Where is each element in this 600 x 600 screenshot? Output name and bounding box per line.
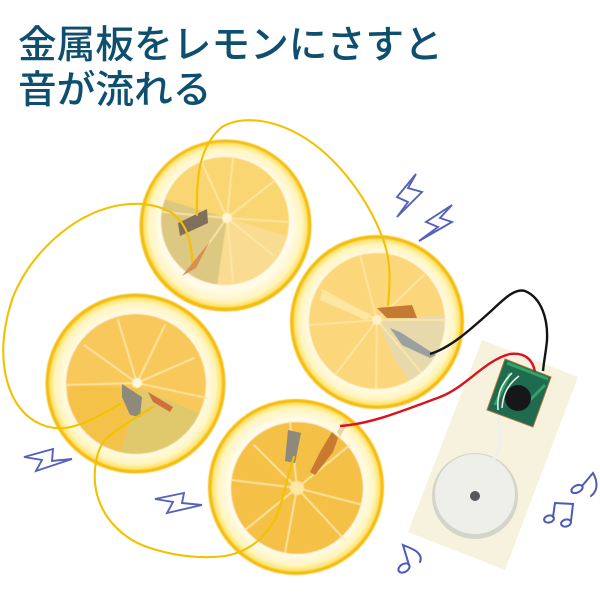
metal plates in left lemon [122, 384, 173, 417]
title [18, 24, 443, 112]
icon: beamed music notes [543, 503, 573, 528]
icon: music note right [570, 473, 596, 496]
black wire [430, 290, 547, 371]
metal plates in bottom lemon [285, 420, 348, 475]
icon: lightning bolt lower middle [155, 493, 202, 513]
metal plates in right lemon [377, 305, 436, 358]
yellow wire: top to left lemon [3, 204, 192, 428]
yellow wire: top to right lemon [197, 120, 390, 305]
red wire [340, 354, 535, 426]
card backing the sound module [408, 340, 578, 570]
white speaker cord [493, 373, 512, 460]
a lighter wedge of lemon segment [320, 292, 372, 320]
lemon slice: bottom [208, 399, 384, 575]
icon: lightning bolt upper 1 [397, 174, 422, 217]
title: 金属板をレモンにさすと [18, 24, 443, 67]
title: 音が流れる [18, 69, 211, 112]
icon: lightning bolt upper 2 [419, 205, 452, 241]
sound circuit board [487, 359, 551, 427]
lemon slice: left [46, 294, 226, 474]
lemon slice: top [140, 140, 312, 312]
icon: lightning bolt lower left [24, 449, 72, 471]
yellow wire: left to bottom lemon [95, 407, 294, 557]
speaker disc [432, 453, 518, 539]
icon: music note bottom [397, 545, 421, 574]
metal plates in top lemon [178, 209, 210, 276]
lemon slice: right [290, 235, 464, 409]
